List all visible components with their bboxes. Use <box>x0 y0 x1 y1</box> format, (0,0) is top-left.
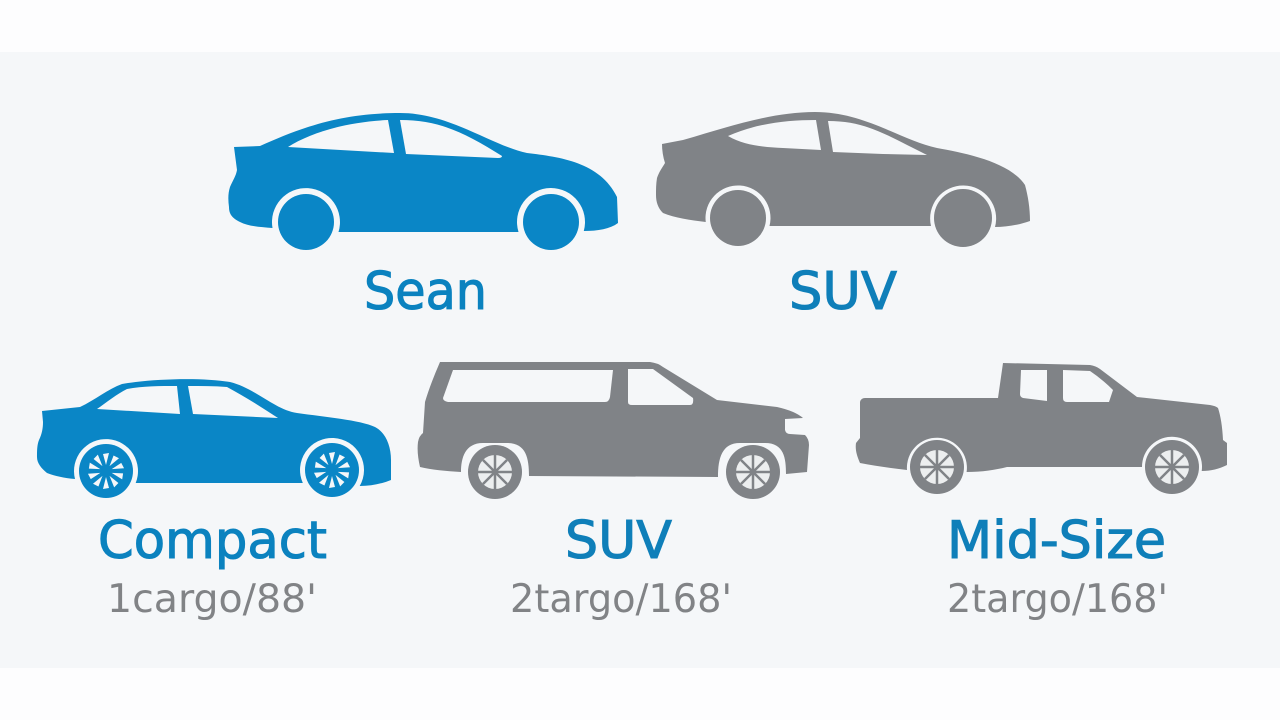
heading: Sean: Sean <box>364 262 487 322</box>
icon: blue sedan <box>228 113 618 250</box>
icon: compact front wheel <box>305 443 359 497</box>
icon: gray van SUV <box>418 362 809 499</box>
heading: SUV top: SUV <box>789 262 897 322</box>
icon: gray pickup truck <box>856 363 1227 494</box>
heading: SUV bottom: SUV <box>565 511 672 571</box>
icon: blue compact car <box>37 379 391 498</box>
heading: Mid-Size: Mid-Size <box>947 511 1166 571</box>
heading: Compact: Compact <box>98 511 327 571</box>
icon: compact rear wheel <box>79 444 133 498</box>
icon: gray sedan <box>656 112 1030 247</box>
text: compact cargo: 1cargo/88' <box>107 576 317 622</box>
text: SUV cargo: 2targo/168' <box>510 576 732 622</box>
text: mid-size cargo: 2targo/168' <box>947 576 1168 622</box>
